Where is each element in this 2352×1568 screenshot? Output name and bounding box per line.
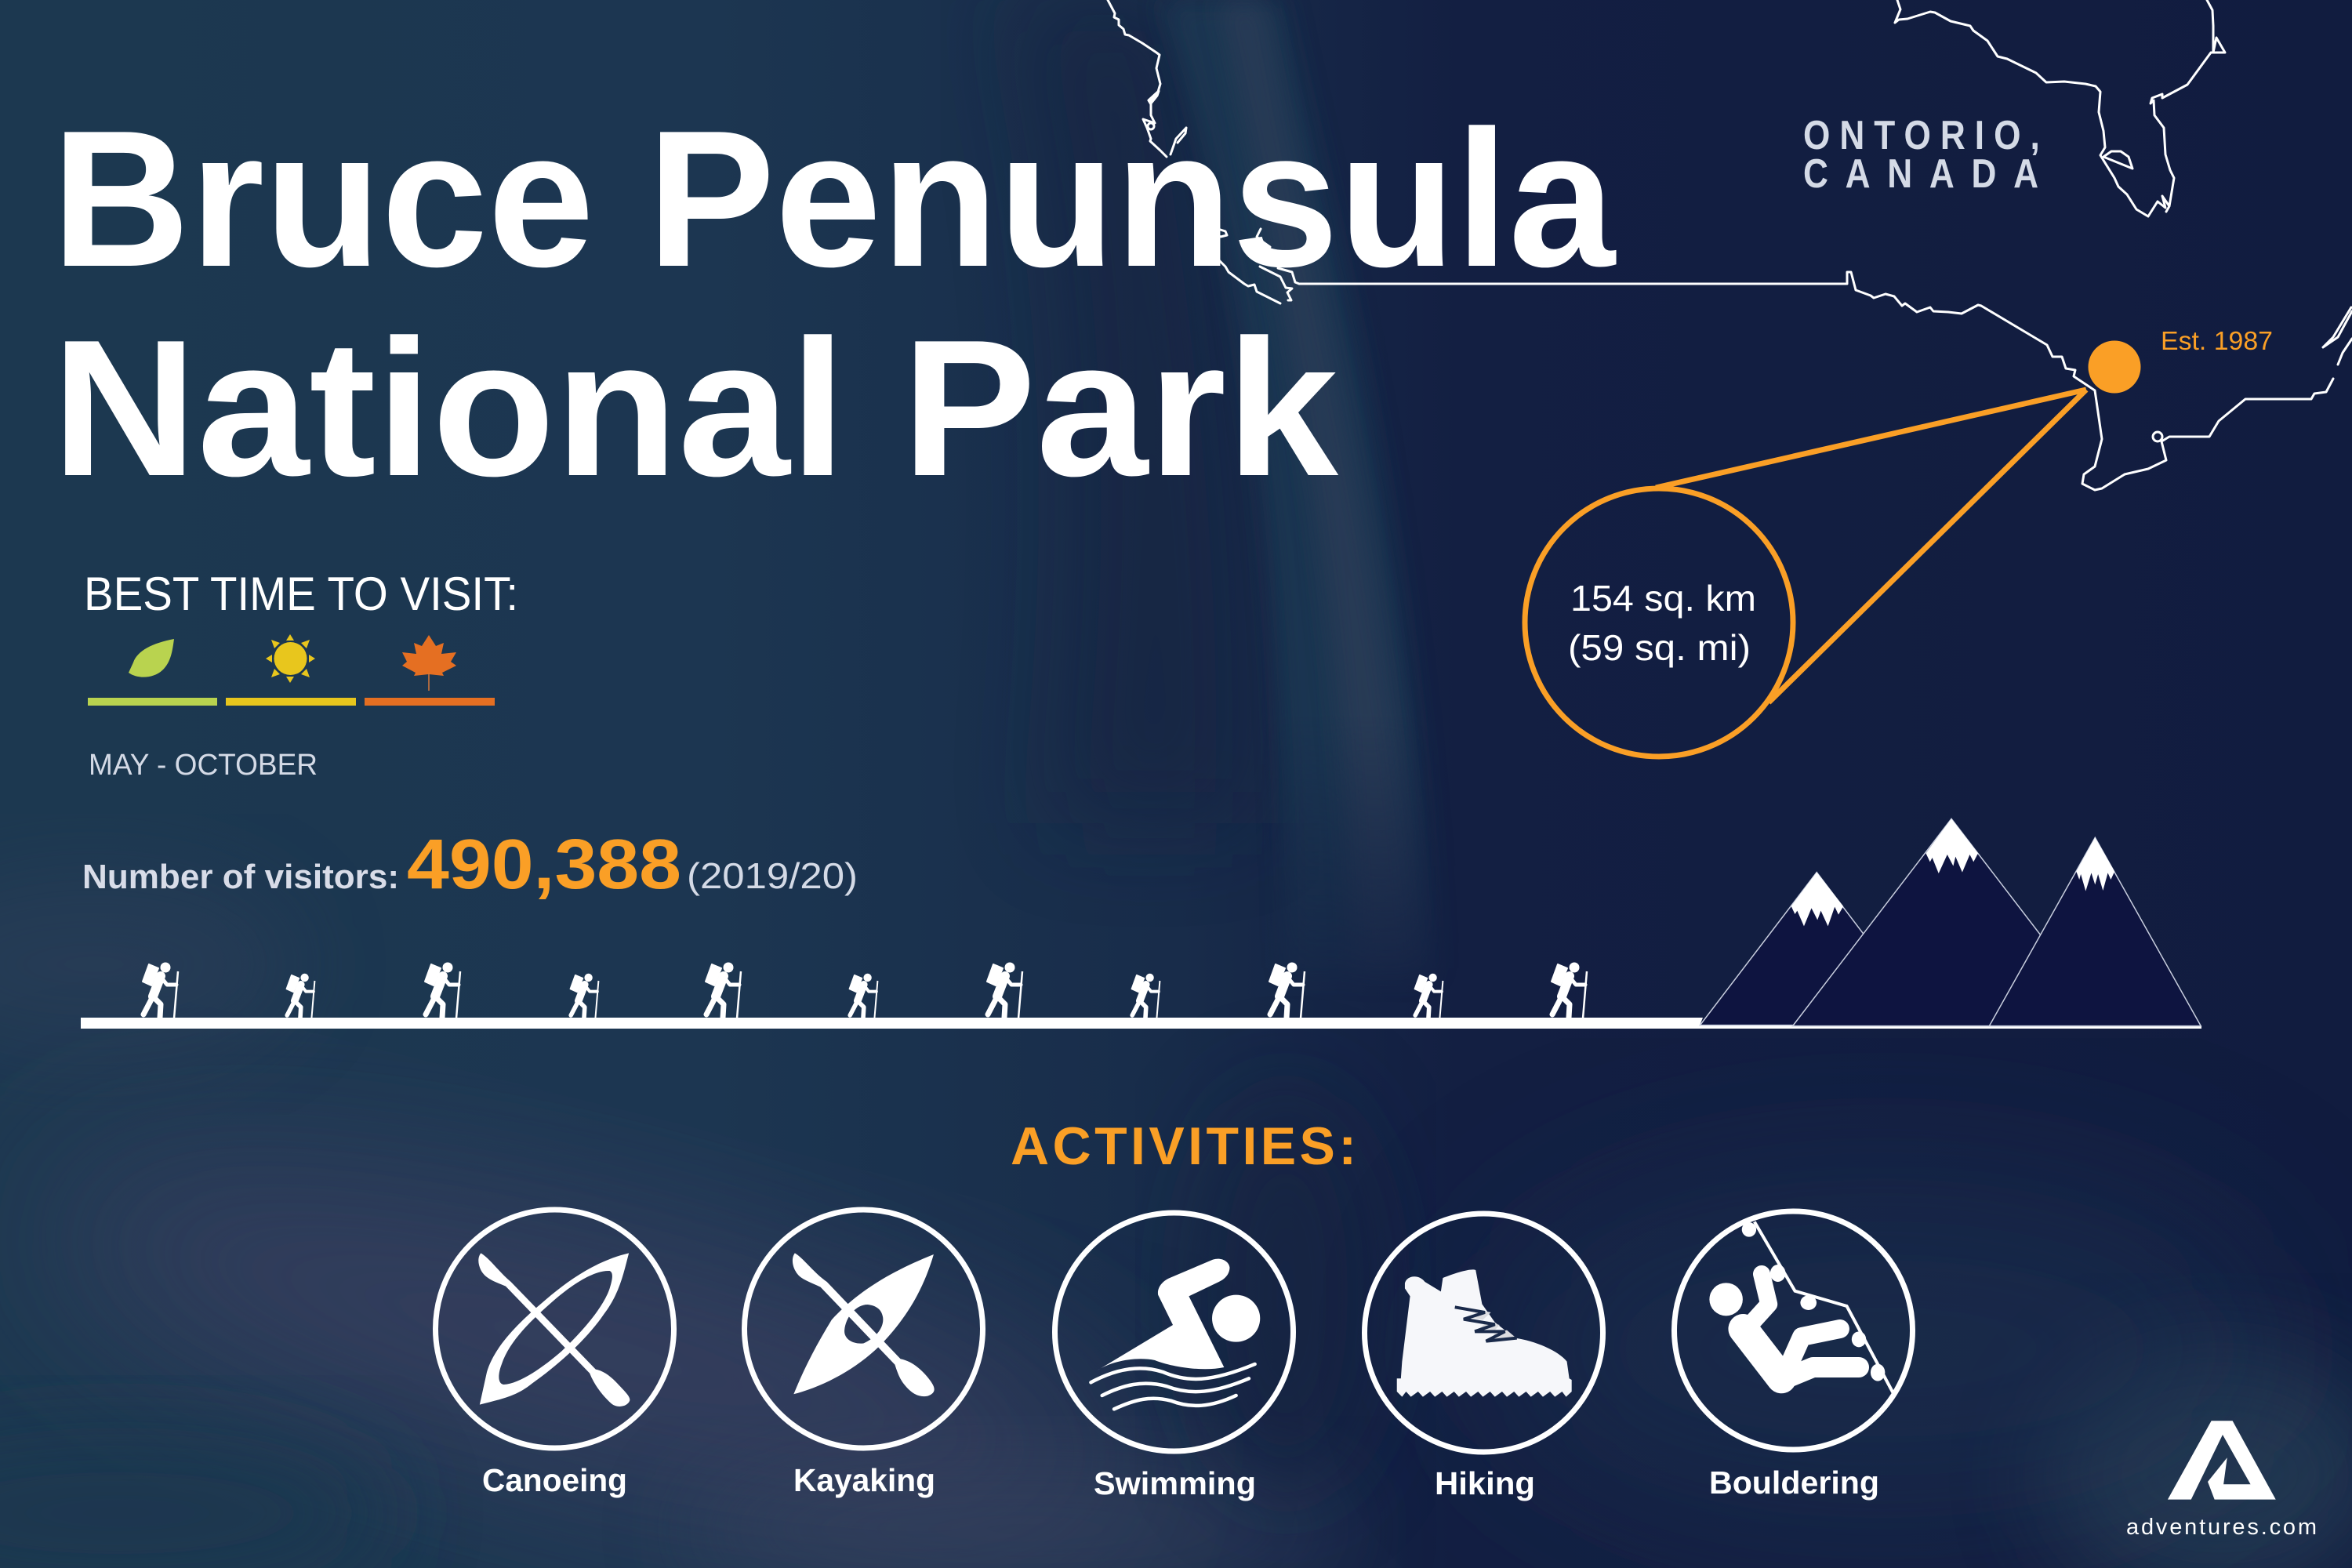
text: months: MAY - OCTOBER [89,749,318,782]
area callout: (59 sq. mi) [1568,627,1751,668]
visitor count: Number of visitors: [82,858,399,896]
logo: adventures.com [2126,1421,2317,1540]
icon: summer sun [266,634,315,683]
activity: hiking [1364,1214,1602,1501]
ground line [81,1018,2201,1029]
logo: adventures.com: adventures.com [2126,1515,2317,1540]
activity: canoeing: Canoeing [482,1462,627,1498]
activity: hiking: Hiking [1435,1465,1535,1501]
location label: CANADA [1803,151,2038,197]
activity: bouldering: Bouldering [1709,1465,1879,1501]
title: National Park [52,299,1339,517]
activity: swimming [1055,1213,1294,1501]
title [52,89,1617,517]
heading: activities: ACTIVITIES: [1011,1116,1356,1176]
activity: kayaking [745,1210,983,1498]
title: Bruce Penunsula [52,89,1617,307]
activity: kayaking: Kayaking [793,1462,935,1498]
season bars [88,698,495,706]
visitor count [82,826,858,904]
row of hikers [143,963,1587,1018]
visitor count: (2019/20) [687,855,858,896]
visitor count: 490,388 [407,826,681,904]
area callout [1525,390,2086,757]
activity: bouldering [1675,1211,1913,1501]
heading: best time: BEST TIME TO VISIT: [84,568,518,620]
location label [1803,113,2040,197]
activity: canoeing [436,1210,674,1498]
park location marker [2089,340,2140,394]
established label: Est. 1987 [2161,326,2273,355]
area callout: 154 sq. km [1570,578,1756,619]
icon: autumn maple leaf [402,635,456,691]
icon: spring leaf [129,639,174,677]
activity: swimming: Swimming [1094,1465,1256,1501]
map outline of Canada [1108,0,2352,490]
location label: ONTORIO, [1803,113,2040,158]
panel: best time to visit [84,568,518,782]
mountains [1700,818,2201,1026]
